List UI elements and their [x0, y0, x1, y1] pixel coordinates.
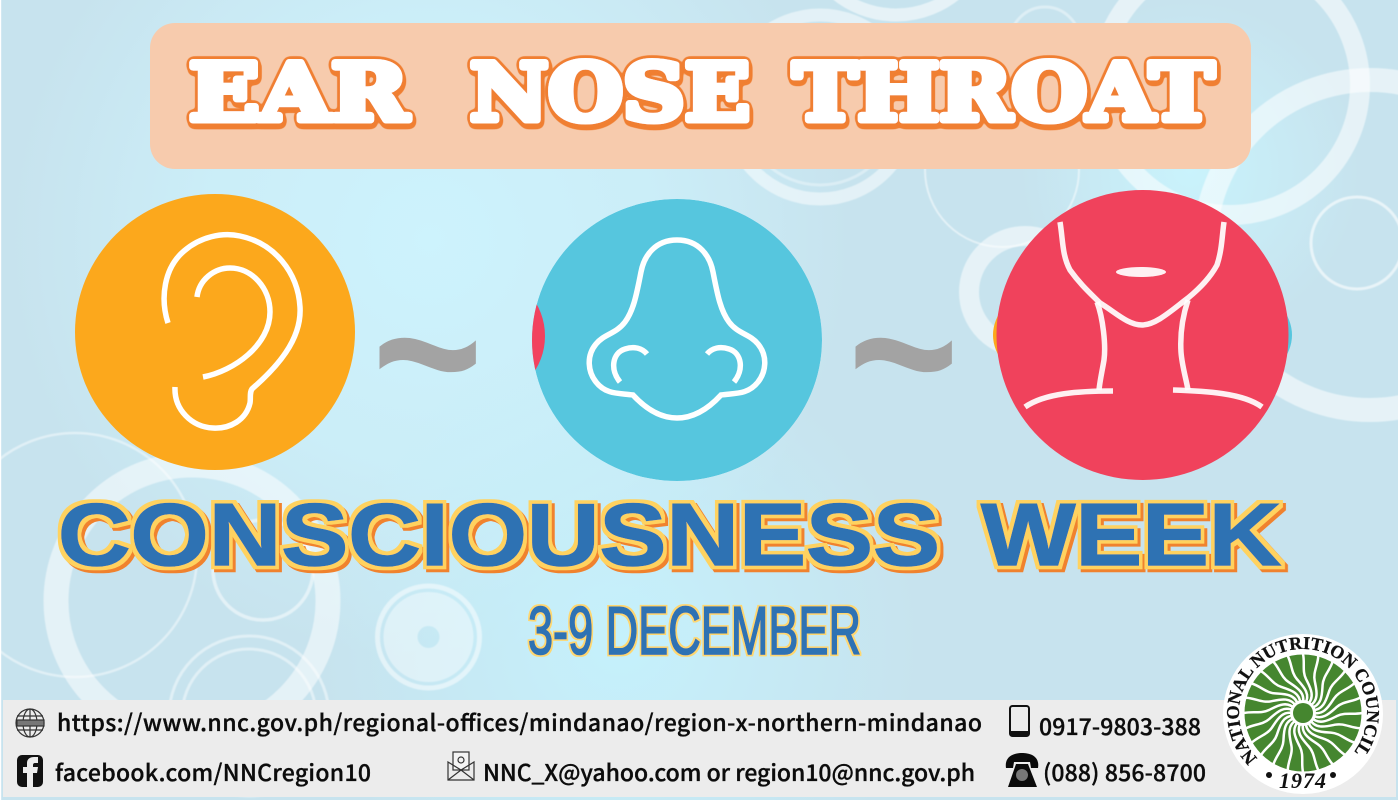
- logo ring text: NATIONAL NUTRITION COUNCIL: [1226, 637, 1380, 766]
- footer contact bar: [3, 700, 1396, 797]
- title text: THROAT: [793, 46, 1214, 139]
- facebook handle: facebook.com/NNCregion10: [55, 754, 371, 788]
- logo year: 1974: [1279, 768, 1327, 793]
- throat circle icon: [993, 190, 1292, 480]
- heading: consciousness week: WEEK: [981, 485, 1281, 584]
- heading: consciousness week: [58, 485, 1281, 584]
- title text: NOSE: [470, 46, 750, 139]
- title banner: [150, 23, 1251, 169]
- icon: globe: [16, 709, 44, 737]
- nose circle icon: [532, 199, 822, 481]
- logo: national nutrition council: [1223, 634, 1383, 794]
- email: NNC_X@yahoo.com or region10@nnc.gov.ph: [483, 754, 975, 788]
- mobile number: 0917-9803-388: [1039, 708, 1201, 742]
- tilde: ~: [848, 231, 959, 474]
- ear circle icon: [75, 194, 355, 470]
- icon: facebook: [17, 755, 43, 787]
- icon: mobile phone: [1010, 706, 1029, 736]
- landline number: (088) 856-8700: [1043, 754, 1206, 788]
- icon: email envelope: [448, 752, 474, 780]
- icon: telephone: [1006, 753, 1038, 787]
- date: 3-9 DECEMBER: [528, 593, 861, 669]
- title text: EAR: [189, 46, 410, 139]
- tilde: ~: [372, 231, 483, 474]
- heading: consciousness week: CONSCIOUSNESS: [58, 485, 940, 584]
- website url: https://www.nnc.gov.ph/regional-offices/mindanao/region-x-northern-mindanao: [57, 704, 982, 738]
- logo rays: [1244, 654, 1362, 772]
- title text: [189, 46, 1214, 139]
